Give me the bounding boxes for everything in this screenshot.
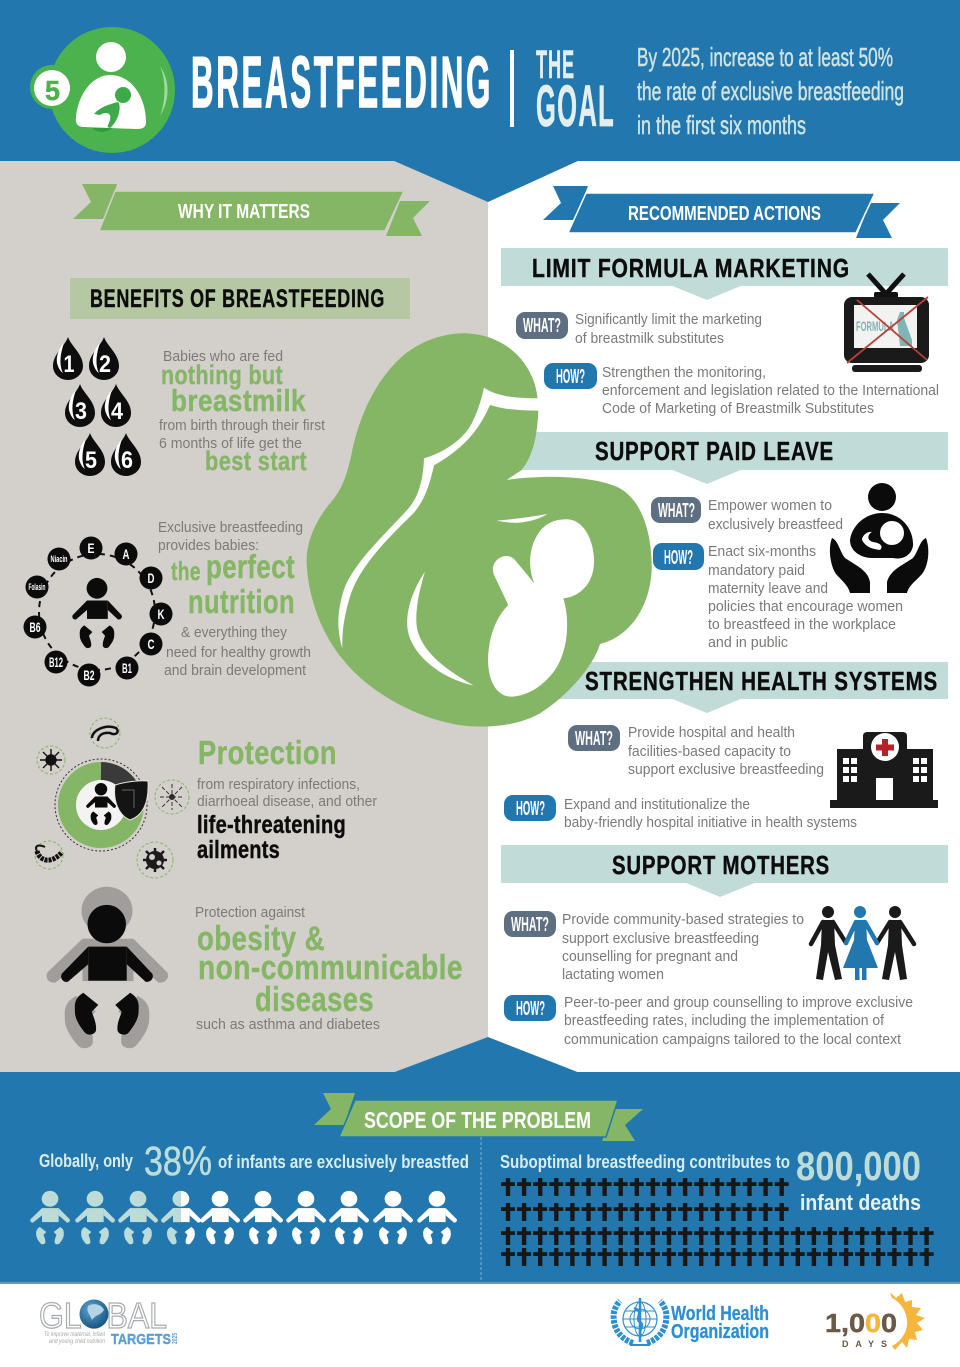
action 2: what: exclusively breastfeed (708, 517, 843, 533)
action 1: what: WHAT? (523, 315, 561, 337)
benefit 4: text: such as asthma and diabetes (196, 1017, 380, 1033)
benefit 2: vitamin ring icon (24, 536, 172, 686)
benefit 3: text: diarrhoeal disease, and other (197, 794, 377, 810)
action 3: what (568, 725, 824, 778)
action 2: what (651, 497, 843, 533)
action 2: what: Empower women to (708, 498, 832, 514)
action 3: how: Expand and institutionalize the (564, 797, 750, 813)
heading: the goal: THE (536, 43, 575, 87)
action 2: what: WHAT? (658, 500, 695, 522)
ribbon: recommended actions (543, 186, 900, 238)
chart: ten baby pictogram, 38 percent teal (30, 1191, 457, 1244)
ribbon: scope of the problem (314, 1093, 643, 1141)
text: goal statement (637, 42, 904, 140)
benefit 2: text: nutrition (188, 583, 295, 620)
benefit 1: text: best start (205, 446, 307, 476)
benefit 2: vitamin ring icon: A (122, 546, 130, 562)
logo: world health organization: World Health (671, 1303, 769, 1325)
icon: hospital (830, 732, 938, 808)
benefit 2: vitamin ring icon: Folasin (28, 582, 46, 592)
benefit 3: text (197, 734, 377, 864)
benefit 2: text: Exclusive breastfeeding (158, 520, 303, 536)
stat: 38 percent text: 38% (144, 1138, 212, 1184)
heading: benefits of breastfeeding (70, 278, 410, 319)
benefit 2: vitamin ring icon: B1 (122, 660, 132, 676)
section bar: support paid leave: SUPPORT PAID LEAVE (595, 436, 834, 466)
logo: world health organization: Organization (671, 1321, 769, 1343)
benefit 3: text: from respiratory infections, (197, 777, 360, 793)
ribbon: why it matters: WHY IT MATTERS (178, 201, 310, 223)
benefit 2: vitamin ring icon: C (148, 636, 154, 652)
section bar: support mothers: SUPPORT MOTHERS (612, 850, 830, 880)
action 2: how: to breastfeed in the workplace (708, 617, 896, 633)
action 3: what: Provide hospital and health (628, 725, 795, 741)
logo: world health organization (614, 1298, 769, 1345)
logo: global targets: TARGETS (111, 1331, 171, 1348)
action 3: what: support exclusive breastfeeding (628, 762, 824, 778)
benefit 2: text: need for healthy growth (166, 645, 311, 661)
benefit 2: text: and brain development (164, 663, 306, 679)
benefit 1: text: breastmilk (171, 383, 306, 418)
benefit 2: vitamin ring icon: E (88, 540, 94, 556)
action 4: what: counselling for pregnant and (562, 949, 738, 965)
action 2: how: HOW? (664, 547, 693, 569)
icon: crossed-out television: FORMULA (856, 318, 894, 334)
icon: crossed-out television (844, 274, 929, 372)
action 4: what: Provide community-based strategies to (562, 912, 804, 928)
text: BREASTFEEDING (191, 43, 493, 123)
benefit 3: text: ailments (197, 836, 280, 864)
action 3: what: WHAT? (575, 728, 613, 750)
logo: 1000 days: DAYS (842, 1339, 887, 1349)
action 4: how: communication campaigns tailored to the local context (564, 1032, 901, 1048)
chart: rows of crosses (501, 1178, 934, 1266)
benefit 1: drops icons: 3 (75, 398, 87, 425)
panel: why it matters background (0, 160, 488, 1072)
benefit 1: drops icons: 4 (111, 398, 124, 425)
logo: 1000 days: 1,000 (825, 1308, 897, 1338)
action 4: how: HOW? (516, 998, 545, 1020)
benefit 1: text: from birth through their first (159, 418, 325, 434)
benefit 1: text: 6 months of life get the (159, 436, 302, 452)
section bar: support mothers (501, 845, 948, 897)
stat: 38 percent text: of infants are exclusively breastfed (218, 1152, 469, 1172)
logo: global targets: To improve maternal, infant (44, 1332, 105, 1338)
logo: global targets: GLOBAL (39, 1295, 167, 1336)
benefit 4: text: obesity & (197, 920, 325, 958)
panel: header band (0, 0, 960, 202)
header icon: target 5 badge (30, 27, 175, 153)
action 3: how: HOW? (516, 798, 545, 820)
header icon: target 5 badge: 5 (45, 75, 60, 106)
action 1: how (544, 363, 939, 417)
stat: 800,000 text: Suboptimal breastfeeding contributes to (500, 1152, 790, 1172)
action 2: how: maternity leave and (708, 581, 828, 597)
action 2: how (653, 543, 903, 651)
action 4: how: Peer-to-peer and group counselling to improve exclusive (564, 995, 913, 1011)
action 3: what: facilities-based capacity to (628, 744, 791, 760)
action 4: what: WHAT? (511, 914, 549, 936)
action 2: how: policies that encourage women (708, 599, 903, 615)
benefit 1: drops icons: 6 (121, 447, 133, 474)
benefit 3: text: Protection (198, 734, 337, 771)
benefit 4: text (195, 905, 463, 1033)
benefit 3: protection icon (35, 718, 189, 878)
benefit 2: vitamin ring icon: B12 (49, 654, 63, 670)
action 4: how: breastfeeding rates, including the implementation of (564, 1013, 885, 1029)
logo: global targets: and young child nutrition (49, 1339, 106, 1345)
benefit 2: text: perfect (206, 548, 295, 585)
benefit 1: drops icons: 5 (85, 447, 97, 474)
action 3: how: baby-friendly hospital initiative in health systems (564, 815, 857, 831)
section bar: limit formula marketing (501, 248, 948, 300)
stat: 800,000 text: infant deaths (800, 1190, 921, 1215)
benefit 1: drops icons (53, 337, 141, 476)
action 4: what: support exclusive breastfeeding (562, 931, 759, 947)
stat: 800,000 text: 800,000 (796, 1143, 921, 1189)
benefit 2: vitamin ring icon: B6 (30, 619, 41, 635)
divider (510, 50, 514, 127)
action 1: how: Code of Marketing of Breastmilk Substitutes (602, 401, 874, 417)
action 1: what: Significantly limit the marketing (575, 312, 762, 328)
benefit 2: vitamin ring icon: K (158, 606, 164, 622)
action 1: how: Strengthen the monitoring, (602, 365, 766, 381)
benefit 4: text: non-communicable (198, 949, 463, 987)
heading: the goal (536, 43, 615, 139)
section bar: limit formula marketing: LIMIT FORMULA MARKETING (532, 253, 850, 283)
action 3: how (504, 795, 857, 831)
text: goal statement: in the first six months (637, 110, 806, 140)
ribbon: scope of the problem: SCOPE OF THE PROBLEM (364, 1107, 591, 1133)
central figure: mother and baby (307, 333, 652, 727)
action 4: what (504, 911, 804, 983)
stat: 38 percent text (39, 1138, 469, 1184)
benefit 2: vitamin ring icon: D (148, 570, 154, 586)
benefit 1: text (159, 349, 325, 476)
action 4: what: lactating women (562, 967, 664, 983)
ribbon: why it matters (73, 184, 430, 236)
logo: global targets: 2025 (172, 1333, 179, 1344)
benefit 1: drops icons: 1 (64, 351, 74, 378)
benefit 4: baby icon with halo (47, 887, 168, 1048)
benefit 4: text: diseases (255, 981, 374, 1019)
action 1: what (516, 312, 762, 347)
benefit 4: text: Protection against (195, 905, 305, 921)
benefit 1: drops icons: 2 (99, 351, 111, 378)
benefit 2: text: & everything they (181, 625, 288, 641)
section bar: strengthen health systems (540, 662, 948, 713)
action 4: how (504, 995, 913, 1048)
benefit 1: text: Babies who are fed (163, 349, 283, 365)
logo: 1000 days (825, 1292, 925, 1350)
icon: three people (811, 906, 914, 980)
section bar: support paid leave (515, 432, 948, 484)
action 2: how: Enact six-months (708, 544, 816, 560)
stat: 38 percent text: Globally, only (39, 1151, 133, 1171)
panel: scope band (0, 1037, 960, 1284)
benefit 2: text: provides babies: (158, 538, 259, 554)
action 1: how: enforcement and legislation related to the International (602, 383, 939, 399)
divider: dashed vertical (480, 1137, 482, 1280)
action 1: what: of breastmilk substitutes (575, 331, 724, 347)
action 2: how: and in public (708, 635, 788, 651)
icon: mother in protective hands (830, 483, 928, 593)
stat: 800,000 text (500, 1143, 921, 1215)
benefit 3: text: life-threatening (197, 811, 346, 839)
benefit 1: text: nothing but (161, 360, 283, 390)
benefit 2: text: the (171, 556, 201, 586)
text: GOAL (536, 74, 615, 139)
benefit 2: text (158, 520, 311, 679)
benefit 2: vitamin ring icon: B2 (84, 667, 95, 683)
action 1: how: HOW? (556, 366, 585, 388)
heading: benefits of breastfeeding: BENEFITS OF BREASTFEEDING (90, 285, 385, 313)
ribbon: recommended actions: RECOMMENDED ACTIONS (628, 203, 821, 225)
action 2: how: mandatory paid (708, 563, 805, 579)
benefit 2: vitamin ring icon: Niacin (50, 554, 68, 564)
